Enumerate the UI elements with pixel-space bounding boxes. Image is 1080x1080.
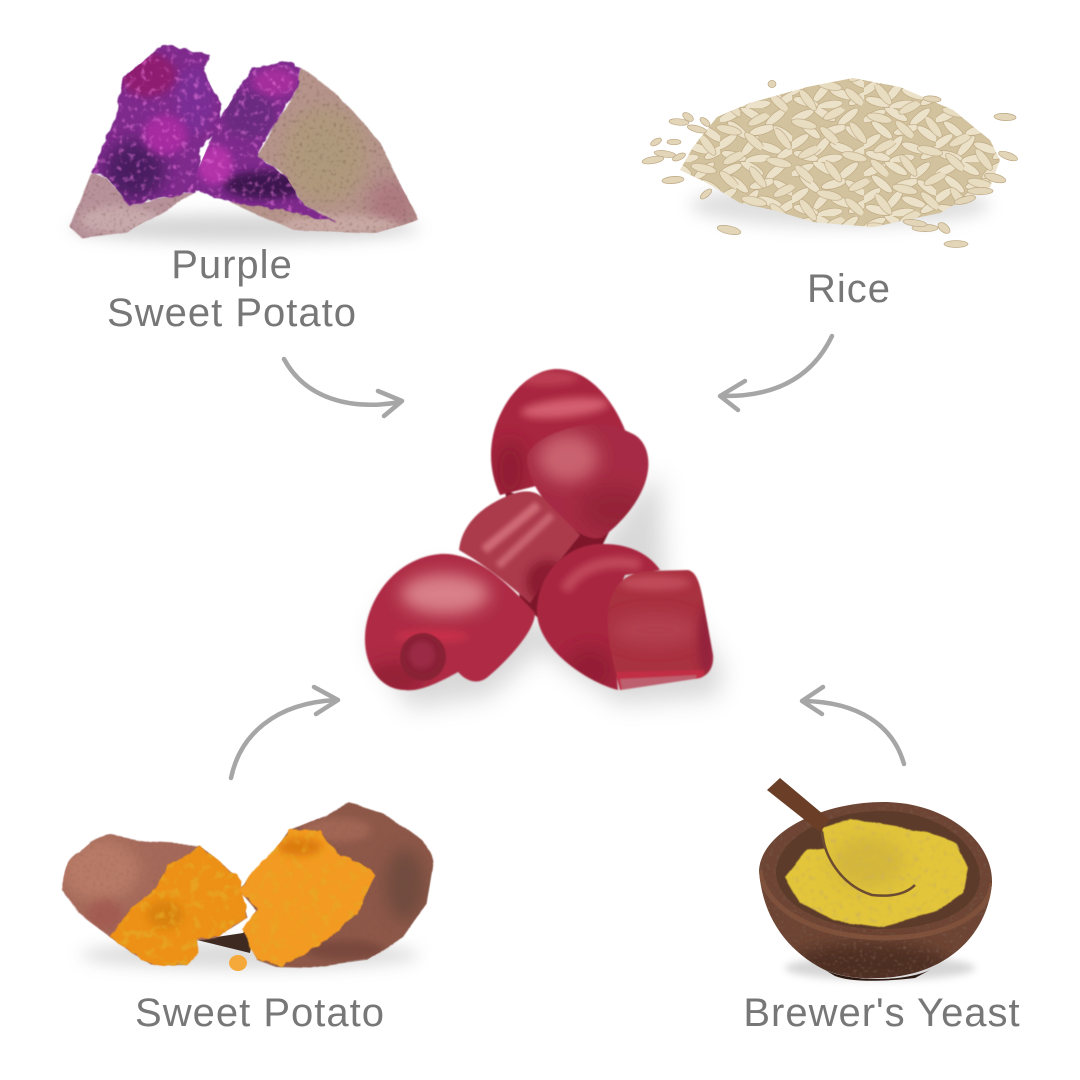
arrow: purple sweet potato to treat <box>284 359 402 416</box>
label: sweet potato line two: Sweet Potato <box>107 291 357 335</box>
arrow: yeast to treat <box>802 687 904 764</box>
icon: rice pile <box>642 70 1019 247</box>
label: sweet potato: Sweet Potato <box>135 991 385 1035</box>
label: rice: Rice <box>807 267 891 311</box>
sweet potato: crumb <box>229 955 247 971</box>
label: purple sweet potato: Purple <box>171 243 293 287</box>
bowl: wooden spoon <box>767 778 915 896</box>
bowl: outer body <box>755 798 995 987</box>
rice: scattered grains <box>642 80 1019 247</box>
treat: dark backing between lobes <box>505 490 610 620</box>
icon: brewer's yeast bowl <box>755 778 995 987</box>
arrow: rice to treat <box>720 336 832 410</box>
bowl: interior <box>776 811 980 929</box>
treat: right back lobe <box>536 543 661 691</box>
treat: right front roll <box>608 568 714 691</box>
bowl: yeast powder <box>780 815 972 930</box>
icon: orange sweet potato <box>60 800 435 971</box>
treat: front top lobe <box>528 426 650 539</box>
label: brewer's yeast: Brewer's Yeast <box>743 991 1021 1035</box>
treat: middle section <box>458 490 580 603</box>
arrow: sweet potato to treat <box>231 687 338 778</box>
icon: purple sweet potato <box>60 40 430 245</box>
icon: red chew treat <box>360 360 722 708</box>
treat: left ball with spiral end <box>360 550 540 695</box>
treat: back top lobe <box>490 368 626 496</box>
